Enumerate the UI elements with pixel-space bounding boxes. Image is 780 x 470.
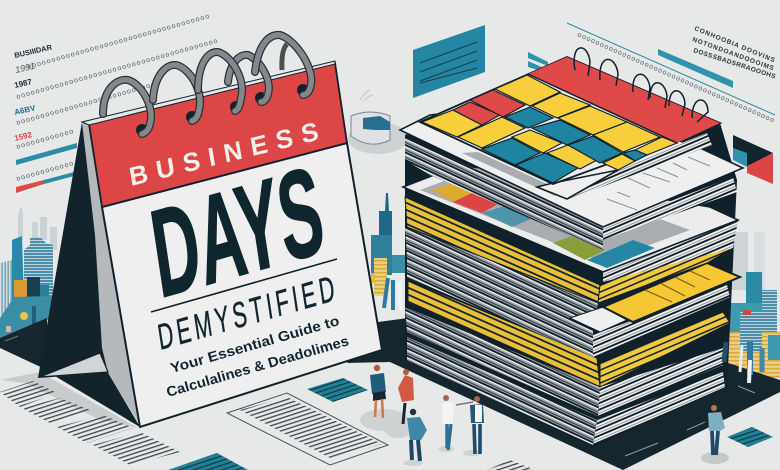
person: man in white shirt <box>438 395 454 452</box>
person: crouching man in blue <box>403 409 427 466</box>
stack of calendars <box>400 48 743 447</box>
chart: top left timeline rows <box>13 13 219 193</box>
stack backing <box>405 57 737 447</box>
calendar red header <box>89 63 347 207</box>
upper yellow pages <box>405 197 733 303</box>
chart: top left timeline rows: 1592 <box>13 130 33 143</box>
spiral loops <box>574 48 708 122</box>
icon: geometric shapes <box>733 135 773 184</box>
person: man in light blue <box>701 405 729 464</box>
calendar back stand <box>38 122 140 427</box>
chart: top left timeline rows: oooooooooooooooooooooooooooooooooooooooooo <box>16 37 219 101</box>
top white sheet <box>400 100 743 227</box>
chart: top left timeline rows: BUSIIIDAR <box>13 42 53 60</box>
top book pages <box>405 137 737 250</box>
chart: top left timeline rows: oooooooooooo <box>16 160 75 183</box>
yellow book pages <box>408 280 730 387</box>
subtitle line 2: Calculalines & Deadolimes <box>164 332 351 400</box>
city: left skyline <box>0 208 57 338</box>
heading: DEMYSTIFIED: DEMYSTIFIED <box>155 269 337 358</box>
document: outlined page <box>227 393 388 465</box>
calendar top edge <box>82 61 335 125</box>
yellow open sheet <box>603 263 740 322</box>
chart: top right timeline: DOSSSBADSRRAOOOHS <box>692 47 777 81</box>
city: right skyline <box>708 232 780 378</box>
gray book pages <box>405 307 723 416</box>
calendar front page <box>102 143 382 427</box>
chart: top left timeline rows: oooooooooooo <box>16 128 75 151</box>
chart: top left timeline rows: 1991 <box>14 61 36 75</box>
middle gray pages <box>405 227 730 357</box>
person: woman in suit <box>360 365 408 431</box>
chart: top left timeline rows: oooooooooooooooooooooooooooooooooooooo <box>27 13 211 71</box>
ring binding <box>103 35 311 136</box>
divider line <box>151 259 337 312</box>
heading: DAYS: DAYS <box>143 141 331 325</box>
subtitle line 1: Your Essential Guide to <box>168 312 341 376</box>
ground: dark road <box>0 318 780 470</box>
person: woman in red <box>384 369 414 438</box>
chart: top left timeline rows: A6BV <box>13 103 37 117</box>
ring backs <box>282 44 287 70</box>
chart: top left timeline rows: 1987 <box>13 77 33 90</box>
wall calendar <box>38 35 382 427</box>
bottom book pages <box>407 337 725 445</box>
icon: round dial <box>348 90 408 154</box>
heading: BUSINESS: BUSINESS <box>127 116 321 192</box>
chart: top right timeline: NOTONDOANDOOOIMS <box>691 36 775 73</box>
person: man in dark jacket <box>456 396 484 456</box>
white wedge sheet <box>570 307 627 332</box>
document: teal cards <box>168 378 773 470</box>
chart: top right timeline: CONHOOBIA DOOVINS <box>693 25 776 64</box>
city: center skyline <box>371 193 406 310</box>
people: city crowd <box>724 342 762 383</box>
chart: top left timeline rows: oooooooooooooooooooooooooooooo <box>16 80 162 127</box>
document lines: bottom left <box>0 372 180 465</box>
second book sheet <box>403 160 738 282</box>
panel: teal note card <box>413 25 548 98</box>
top calendar <box>420 48 720 199</box>
chart: top right timeline: oooooooooooooooooooooooooooooooooooooooooooo <box>576 31 776 125</box>
top calendar pages <box>567 133 712 200</box>
